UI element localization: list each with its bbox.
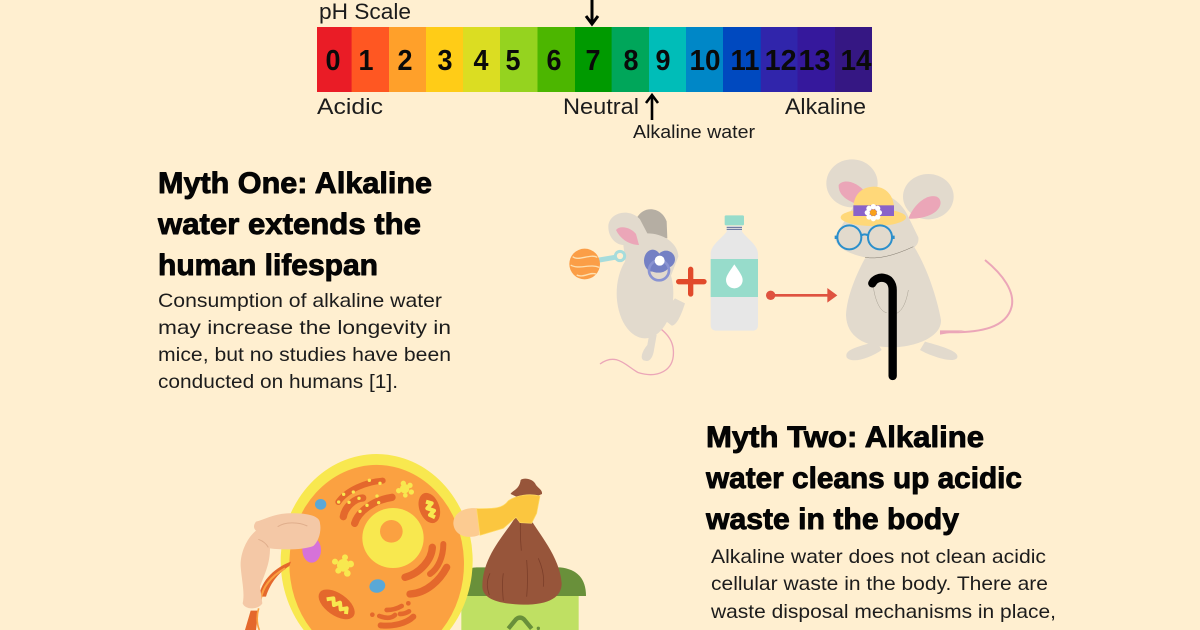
icon: elderly mouse bbox=[826, 159, 1012, 376]
text block: myth one body: conducted on humans [1]. bbox=[158, 371, 398, 393]
organelles bbox=[338, 481, 447, 626]
icon: sun hat with flower bbox=[841, 187, 906, 226]
arrow: pointing down at 7 bbox=[586, 0, 598, 24]
icon: trash bag bbox=[482, 479, 562, 605]
heading: myth one: human lifespan bbox=[158, 249, 378, 282]
pH numbers: 13 bbox=[798, 45, 830, 77]
heading: myth two: waste in the body bbox=[705, 503, 959, 536]
heading: myth one bbox=[157, 167, 432, 282]
icon: recycling bin bbox=[461, 567, 586, 630]
pH numbers bbox=[326, 45, 872, 77]
icon: walking cane bbox=[872, 278, 893, 376]
icon: baby mouse bbox=[569, 209, 685, 375]
icon: plus sign bbox=[679, 269, 704, 294]
label: Acidic: Acidic bbox=[317, 94, 383, 119]
label: Alkaline water: Alkaline water bbox=[633, 122, 755, 142]
arrow: pointing up at alkaline water bbox=[646, 95, 658, 120]
pH numbers: 1 bbox=[358, 45, 374, 77]
pH numbers: 7 bbox=[586, 45, 600, 77]
text block: myth one body: mice, but no studies have been bbox=[158, 344, 451, 366]
text block: myth one body: may increase the longevity in bbox=[158, 317, 451, 339]
nucleus bbox=[362, 508, 424, 568]
pH numbers: 2 bbox=[398, 45, 412, 77]
pH numbers: 8 bbox=[624, 45, 638, 77]
icon: blue glasses bbox=[835, 225, 895, 249]
icon: water bottle bbox=[711, 215, 758, 331]
label: Neutral: Neutral bbox=[563, 94, 639, 119]
pH numbers: 9 bbox=[656, 45, 670, 77]
icon: pacifier bbox=[644, 250, 675, 280]
label: Alkaline: Alkaline bbox=[785, 94, 866, 119]
pH numbers: 10 bbox=[690, 45, 720, 77]
heading: myth two bbox=[705, 421, 1022, 536]
heading: myth two: Myth Two: Alkaline bbox=[706, 421, 984, 454]
heading: myth one: water extends the bbox=[157, 208, 421, 241]
heading: myth two: water cleans up acidic bbox=[705, 462, 1022, 495]
pH numbers: 5 bbox=[506, 45, 520, 77]
text block: myth one body bbox=[158, 290, 451, 393]
text block: myth two body: Alkaline water does not clean acidic bbox=[711, 546, 1046, 568]
icon: rattle bbox=[569, 249, 625, 279]
pH numbers: 4 bbox=[474, 45, 488, 77]
pH numbers: 3 bbox=[438, 45, 452, 77]
arrow: red arrow to old mouse bbox=[766, 288, 837, 303]
pH numbers: 0 bbox=[326, 45, 340, 77]
pH colour bar bbox=[317, 27, 872, 92]
text block: myth two body: waste disposal mechanisms in place, bbox=[710, 601, 1056, 623]
pH numbers: 11 bbox=[730, 45, 760, 77]
pH numbers: 12 bbox=[765, 45, 797, 77]
pH numbers: 6 bbox=[546, 45, 562, 77]
text block: myth two body bbox=[710, 546, 1056, 623]
text block: myth one body: Consumption of alkaline water bbox=[158, 290, 443, 312]
illustration: young mouse plus water becomes old mouse bbox=[569, 159, 1012, 376]
icon: left muscular arm with flagellum bbox=[241, 513, 320, 630]
heading: myth one: Myth One: Alkaline bbox=[158, 167, 432, 200]
pH scale chart bbox=[317, 0, 872, 142]
icon: right arm with yellow glove bbox=[453, 495, 540, 537]
text block: myth two body: cellular waste in the body. There are bbox=[711, 573, 1048, 595]
illustration: cell taking out the trash bbox=[241, 454, 586, 630]
pH numbers: 14 bbox=[840, 45, 872, 77]
icon: cell bbox=[281, 454, 473, 630]
